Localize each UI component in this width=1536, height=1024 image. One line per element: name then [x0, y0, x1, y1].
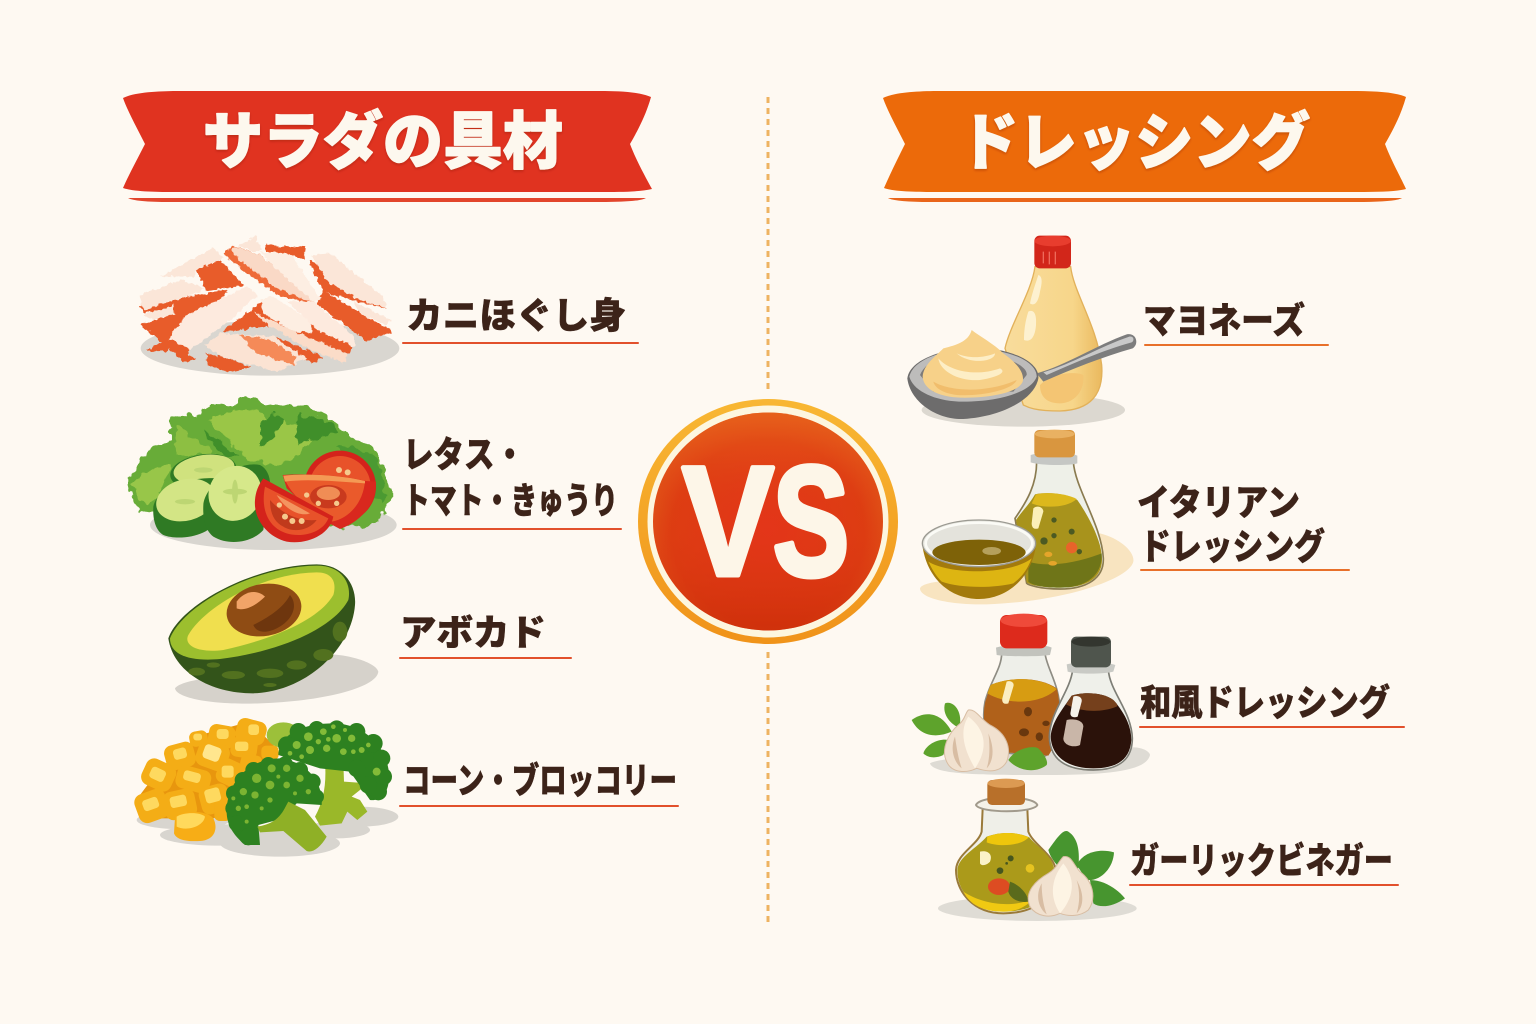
garlic bulb: [944, 710, 1009, 772]
icon: corn and broccoli: [132, 716, 398, 857]
label: avocado: アボカド: [400, 612, 546, 653]
right heading text: ドレッシング: [960, 108, 1310, 178]
VS text: [682, 435, 849, 609]
label: lettuce tomato cucumber: [403, 434, 621, 529]
broccoli: [225, 720, 392, 852]
center dashed divider: [766, 97, 770, 926]
lettuce: [127, 396, 390, 528]
VS text: V: [682, 435, 774, 609]
label: lettuce tomato cucumber: レタス・: [403, 434, 525, 475]
flask: [956, 808, 1056, 913]
icon: garlic vinegar bottle with herbs: [938, 779, 1137, 921]
label: wafu dressing: 和風ドレッシング: [1140, 682, 1390, 723]
tomatoes: [304, 451, 376, 523]
dark-cap bottle: [1049, 670, 1132, 770]
left heading banner: [123, 91, 652, 202]
label: crab meat: カニほぐし身: [406, 295, 626, 336]
VS badge: [638, 399, 898, 644]
spoon: [1037, 334, 1136, 382]
icon: lettuce, tomato, cucumber: [127, 396, 397, 550]
left heading text: サラダの具材: [203, 107, 563, 177]
garlic bulb: [1028, 856, 1093, 916]
label: mayonnaise: マヨネーズ: [1143, 300, 1305, 341]
label: garlic vinegar: ガーリックビネガー: [1130, 840, 1393, 881]
mayonnaise dollop: [923, 330, 1023, 398]
herb leaves: [1048, 831, 1125, 906]
oil bowl: [922, 545, 1036, 599]
right heading banner: [883, 91, 1406, 202]
herb leaves: [912, 703, 1047, 770]
label: Italian dressing: イタリアン: [1137, 482, 1300, 523]
icon: mayonnaise bottle and spoon: [907, 236, 1136, 427]
red-cap bottle: [984, 653, 1060, 757]
label: lettuce tomato cucumber: トマト・きゅうり: [403, 480, 618, 521]
VS text: S: [773, 435, 849, 609]
icon: avocado: [168, 564, 378, 704]
icon: crab meat: [140, 237, 399, 376]
icon: Italian dressing bottle and oil bowl: [920, 430, 1133, 604]
label: Italian dressing: ドレッシング: [1140, 526, 1325, 567]
icon: wafu dressing bottles with garlic: [912, 614, 1150, 775]
label: corn broccoli: コーン・ブロッコリー: [403, 760, 677, 801]
corn kernels: [132, 716, 279, 841]
cucumber slices: [168, 450, 239, 493]
label: Italian dressing: [1137, 482, 1349, 570]
